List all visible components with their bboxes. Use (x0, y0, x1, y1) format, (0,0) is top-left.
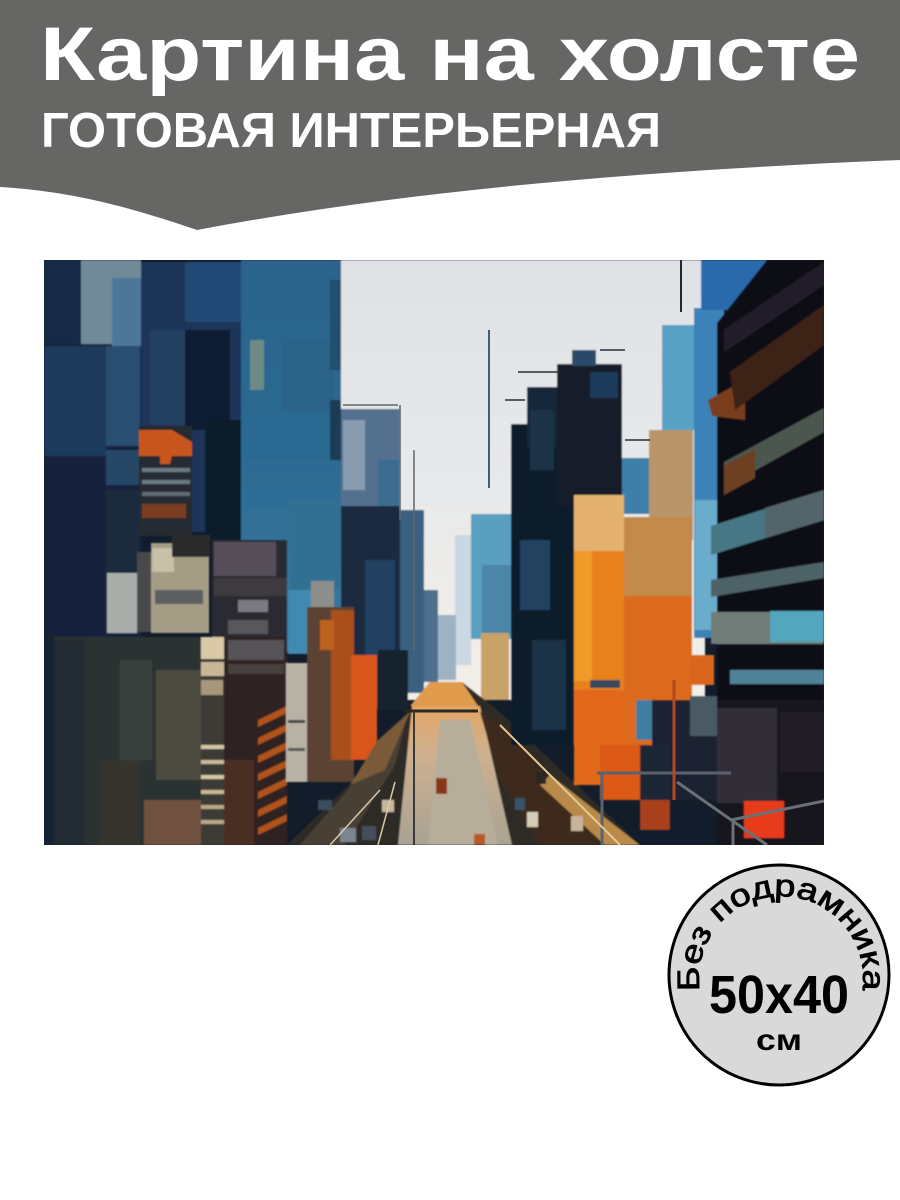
far towers centre (424, 514, 511, 700)
central left orange buildings (307, 581, 408, 782)
badge: size without stretcher (668, 864, 890, 1086)
structural lines (330, 260, 824, 845)
dark glass building (44, 632, 201, 845)
left blue towers (44, 260, 424, 708)
unit: см (756, 1024, 802, 1057)
right dark towers (511, 350, 649, 745)
road (287, 682, 640, 845)
right orange buildings (574, 430, 714, 800)
left orange accent building (139, 426, 192, 536)
curved label: Без подрамника (677, 879, 880, 991)
left mid buildings (107, 535, 287, 640)
lower left striped buildings (201, 637, 307, 845)
lower right blocks (640, 696, 824, 845)
size value: 50x40 (709, 965, 849, 1025)
painting: abstract city street (44, 260, 824, 845)
cars (436, 778, 447, 794)
right foreground building slats (708, 260, 824, 700)
sky (340, 260, 705, 700)
header banner (0, 0, 900, 230)
subtitle: ГОТОВАЯ ИНТЕРЬЕРНАЯ (41, 104, 661, 158)
right blue towers (662, 260, 767, 638)
title: Картина на холсте (40, 12, 860, 97)
